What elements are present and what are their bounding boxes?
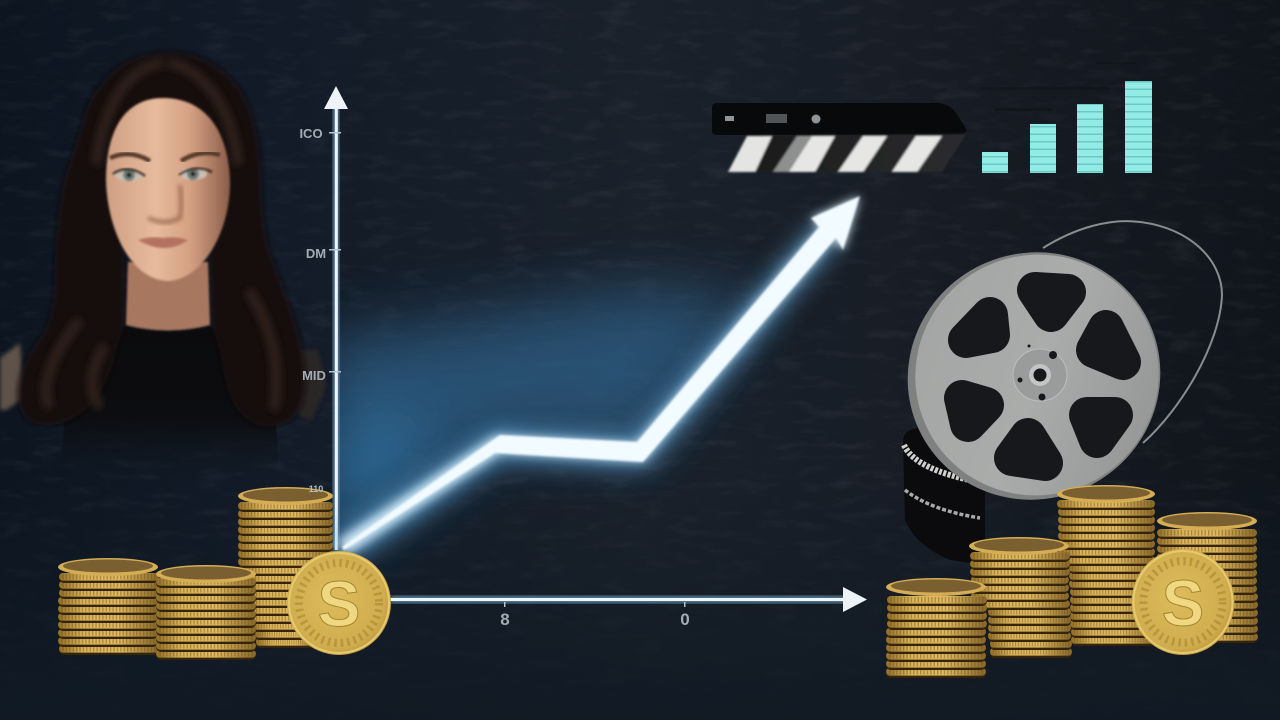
film strip roll <box>903 428 985 565</box>
stack 2 right <box>969 537 1072 658</box>
y axis label ICO <box>299 126 341 141</box>
chart: blue glow beside growth line <box>320 290 760 560</box>
neck <box>126 262 210 330</box>
rising growth arrow <box>342 196 860 550</box>
clapper lower striped band <box>728 134 966 172</box>
stack 4 <box>1157 512 1258 643</box>
eyebrows <box>110 153 220 161</box>
dollar coin left <box>287 551 391 655</box>
bar 2 <box>1030 124 1056 173</box>
hair highlights <box>46 62 276 410</box>
trailing film line <box>1043 221 1222 443</box>
y axis with arrow <box>299 86 348 550</box>
lips <box>138 237 188 248</box>
stack 3 <box>238 487 334 648</box>
y axis label ICO: ICO <box>299 126 323 141</box>
clapperboard <box>712 103 967 172</box>
portrait: woman with long dark hair <box>0 52 326 480</box>
y axis base label: 110 <box>309 484 323 494</box>
stack 3 right <box>1057 485 1156 646</box>
y axis label MID: MID <box>302 368 326 383</box>
eye left <box>113 169 145 181</box>
x axis tick 1: 8 <box>500 610 510 629</box>
right arm <box>298 350 326 420</box>
eye right <box>179 168 212 180</box>
film reel with trailing film <box>867 211 1222 565</box>
clapper top bar <box>712 103 967 135</box>
bar 3 <box>1077 104 1103 173</box>
face <box>106 98 230 281</box>
x axis tick 2: 0 <box>680 610 690 629</box>
stack 1 <box>58 558 159 655</box>
y axis label MID <box>302 368 341 383</box>
dollar coin right <box>1132 549 1234 655</box>
clapper bar markings <box>725 114 820 124</box>
nose shadow <box>148 185 181 222</box>
reel windows <box>962 290 1123 463</box>
y axis label DM: DM <box>306 246 326 261</box>
faint caption lines <box>980 62 1136 111</box>
small teal bar chart <box>980 62 1152 173</box>
stack 1 right <box>886 578 987 678</box>
right coin stacks <box>886 485 1258 678</box>
y axis label DM <box>306 246 341 261</box>
x axis with arrow <box>390 587 867 629</box>
left arm <box>0 343 24 410</box>
dress <box>60 326 280 480</box>
bar 4 <box>1125 81 1152 173</box>
bar 1 <box>982 152 1008 173</box>
reel disc <box>867 211 1201 541</box>
left coin stacks <box>58 484 391 660</box>
hair <box>18 52 305 426</box>
reel hub <box>1013 344 1067 401</box>
stack 2 <box>156 565 256 660</box>
